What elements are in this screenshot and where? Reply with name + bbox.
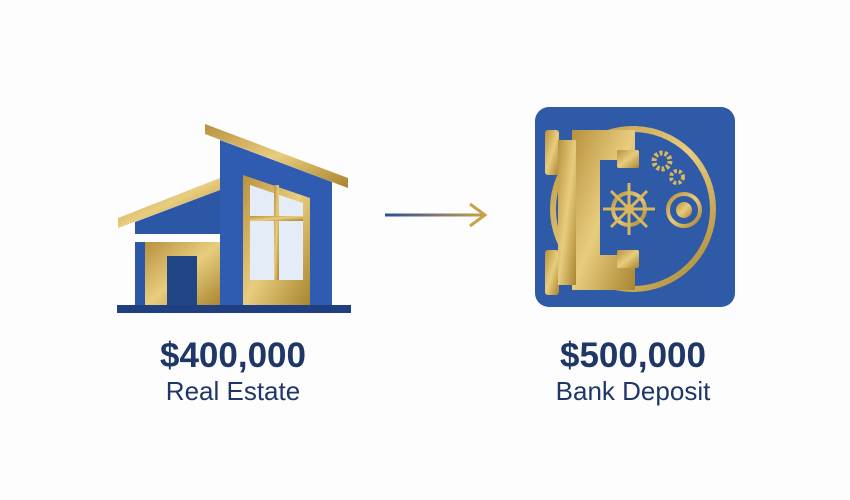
arrow bbox=[385, 204, 485, 226]
icon: vault bbox=[535, 107, 735, 307]
label: real estate bbox=[160, 336, 306, 406]
label: real estate: $400,000 bbox=[160, 336, 306, 375]
label: bank deposit: $500,000 bbox=[560, 336, 706, 375]
label: bank deposit bbox=[556, 336, 710, 406]
label: real estate: Real Estate bbox=[166, 376, 300, 406]
label: bank deposit: Bank Deposit bbox=[556, 376, 710, 406]
icon: house bbox=[117, 124, 351, 313]
